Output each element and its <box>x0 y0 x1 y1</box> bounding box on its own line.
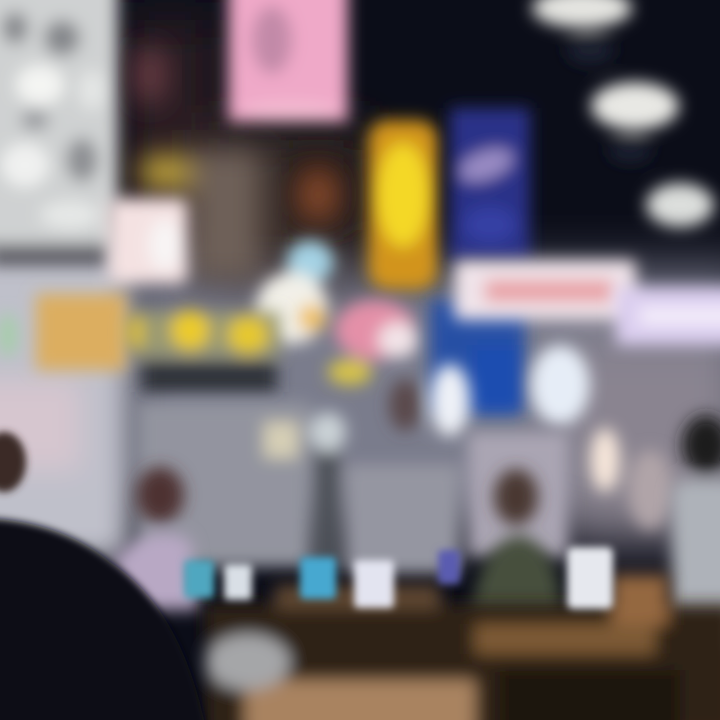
white booth sign <box>108 198 188 284</box>
faint pink glow <box>134 45 166 105</box>
mid hall haze <box>120 20 720 540</box>
panel: orange sign on wall <box>0 294 126 370</box>
panel: pink banner <box>228 0 348 122</box>
panel: checkered white hanging sign <box>0 0 118 266</box>
person: standing far right <box>672 415 720 720</box>
left wall <box>0 240 130 560</box>
yellow round lights row <box>126 310 280 392</box>
person: seated left <box>112 467 200 610</box>
pale blue and white display <box>256 240 418 385</box>
panel: blue column <box>430 300 525 415</box>
laptops and screens on table <box>184 547 613 609</box>
person: seated centre right <box>470 469 562 620</box>
panel: blue banner <box>450 108 530 260</box>
panel: yellow lantern <box>368 120 438 290</box>
panel: pink and white banner <box>454 260 636 320</box>
ceiling lights <box>532 0 714 227</box>
table: wooden bench <box>205 575 720 720</box>
person: foreground dark silhouette <box>0 432 208 720</box>
back booth colours <box>139 150 353 280</box>
panel: purple and white banner <box>616 287 720 345</box>
panel: grey booth counters <box>138 402 568 574</box>
white display screens <box>389 345 672 530</box>
